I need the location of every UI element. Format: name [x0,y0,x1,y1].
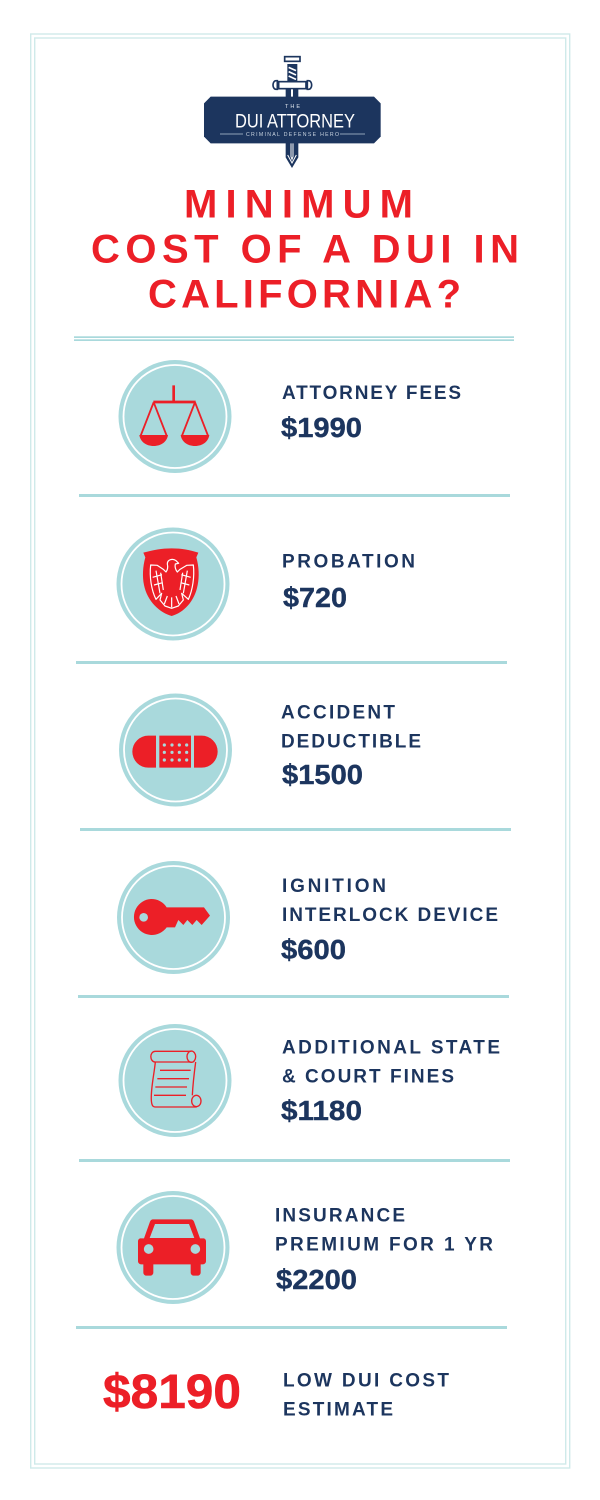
label: ATTORNEY FEES [282,383,461,404]
total estimate [103,1366,449,1420]
icon: sword [204,57,381,168]
price: $2200 [276,1264,357,1295]
row: additional state and court fines: & COURT FINES [282,1066,454,1088]
total amount: $8190 [103,1366,241,1419]
label: ACCIDENT [281,702,395,724]
label: INSURANCE [275,1206,405,1226]
title double divider [74,336,514,341]
logo tagline: CRIMINAL DEFENSE HERO [246,132,339,138]
icon: car [116,1191,230,1304]
label: PROBATION [282,552,415,572]
icon: scroll [118,1024,232,1137]
row: insurance premium [116,1191,493,1304]
row: additional state and court fines [118,1024,500,1137]
icon: scales of justice [118,360,232,473]
total estimate: ESTIMATE [283,1400,393,1420]
row: insurance premium: PREMIUM FOR 1 YR [275,1234,493,1256]
logo name: DUI ATTORNEY: DUI ATTORNEY [235,110,355,132]
price: $1180 [281,1095,362,1126]
logo small word: THE: THE [285,104,300,110]
logo tagline rules [220,133,365,135]
price: $1500 [282,759,363,790]
icon: eagle shield [116,528,230,640]
title line 1: MINIMUM [184,182,413,226]
row: ignition interlock device: INTERLOCK DEVICE [282,905,498,926]
label: ADDITIONAL STATE [282,1038,500,1058]
icon: bandage [119,694,232,806]
price: $1990 [281,412,362,443]
total label: LOW DUI COST [283,1370,449,1392]
price: $600 [281,934,346,965]
row: ignition interlock device [117,861,498,974]
title line 2: COST OF A DUI IN [91,228,519,272]
icon: key [117,861,230,974]
row: accident deductible: DEDUCTIBLE [281,732,421,752]
label: IGNITION [282,876,386,897]
logo: The DUI Attorney [204,57,381,168]
price: $720 [283,582,347,613]
title line 3: CALIFORNIA? [148,272,461,316]
title [91,182,519,316]
row: probation [116,528,415,640]
row: attorney fees [118,360,461,473]
row: accident deductible [119,694,421,806]
